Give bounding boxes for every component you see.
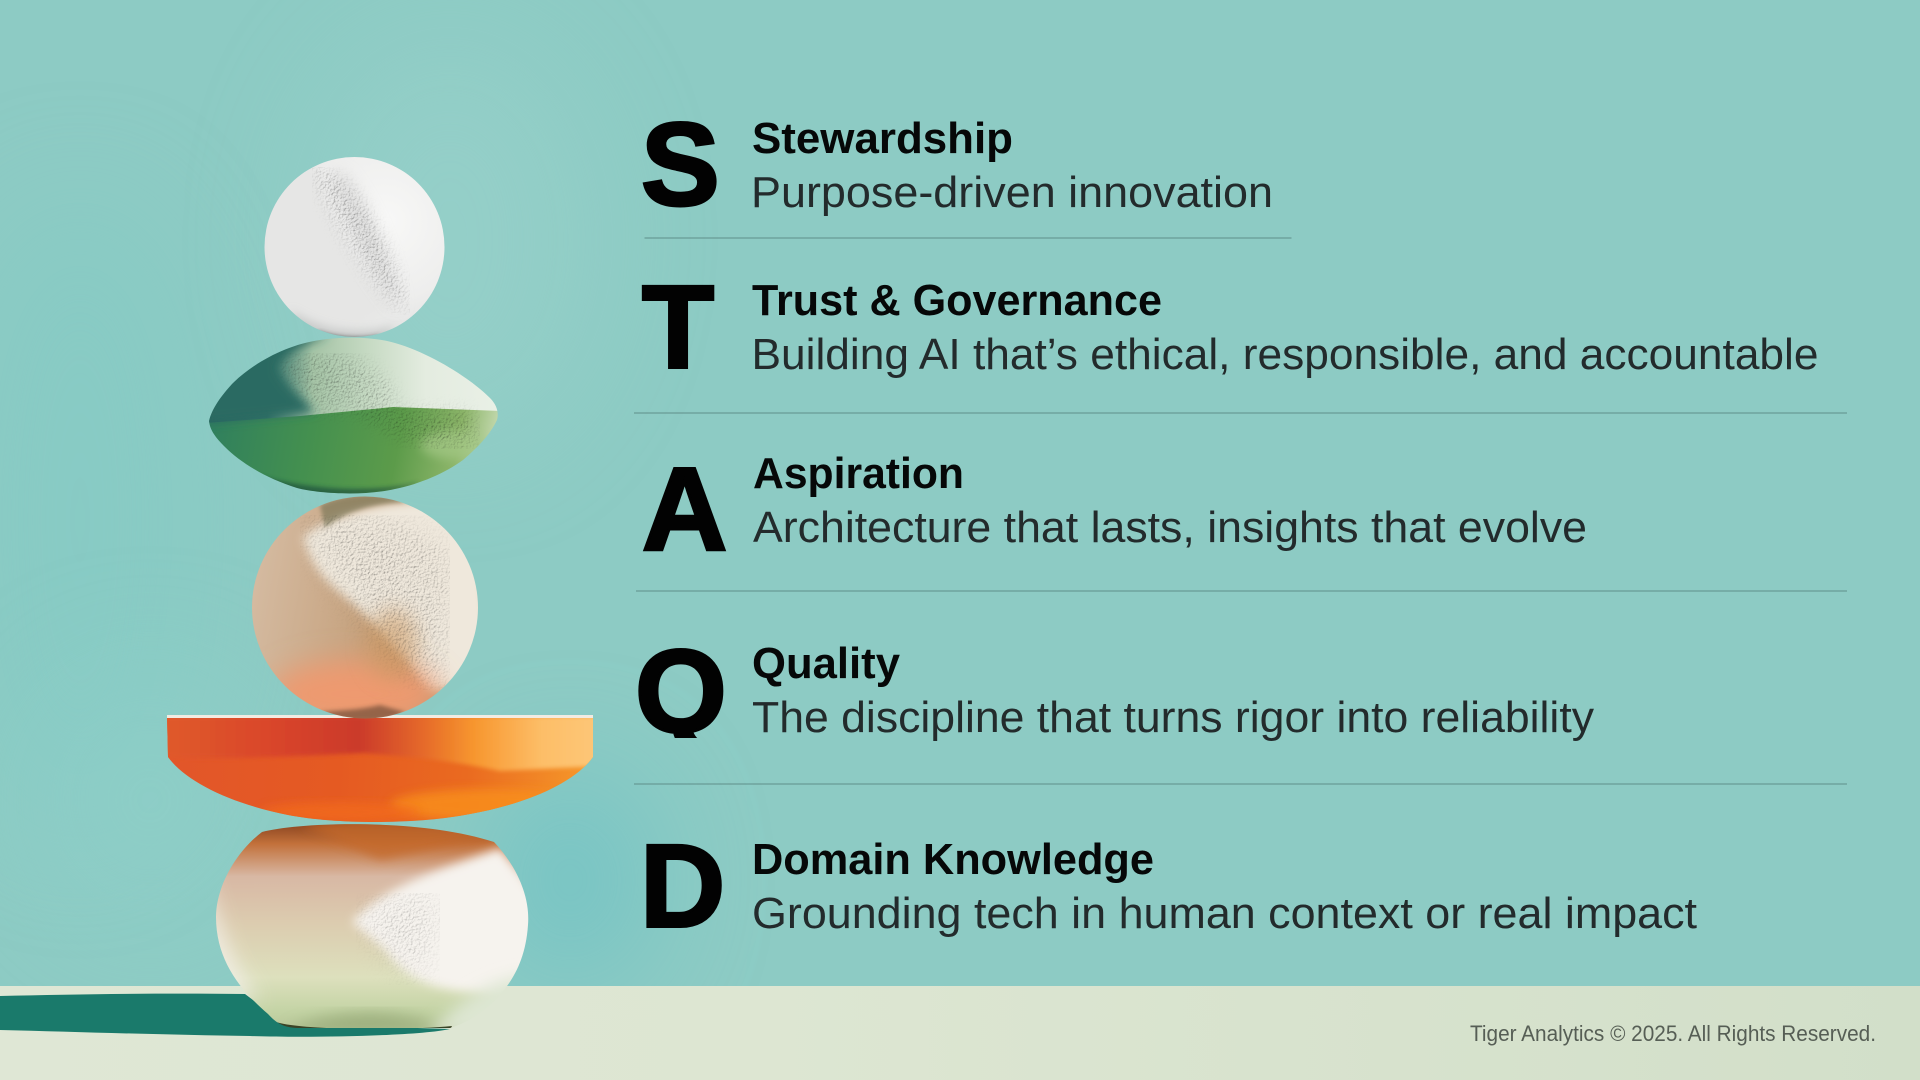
row Q: letter Q: Q [635,626,727,758]
divider 3 [636,590,1847,592]
row A: Aspiration [642,444,1587,576]
footer copyright: Tiger Analytics © 2025. All Rights Reserved. [1470,1021,1876,1046]
row A: Aspiration: A [642,444,727,576]
Quality text [752,639,1594,742]
row D: Domain Knowledge: Domain Knowledge [752,835,1154,884]
acronym list [634,99,1847,952]
stone: bottom white sphere [216,824,528,1028]
stone: green lens [205,335,505,500]
row T: Trust & Governance [642,262,1818,394]
row D: Domain Knowledge [640,820,1697,952]
row A: Aspiration: Architecture that lasts, insights that evolve [753,503,1587,552]
bowl white lip [167,715,593,718]
row T: Trust & Governance: Building AI that’s ethical, responsible, and accountable [752,330,1818,379]
divider 1 [644,238,1292,239]
divider 4 [634,784,1847,785]
row T: Trust & Governance: Trust & Governance [752,276,1162,325]
divider 2 [634,412,1847,414]
row D: Domain Knowledge: Grounding tech in human context or real impact [752,889,1697,938]
row S: Stewardship [641,99,1273,231]
row D: Domain Knowledge: D [640,820,725,952]
illustration: balancing stones [160,155,600,1035]
Quality text: Quality [752,639,901,688]
row S: Stewardship: S [641,99,720,231]
stone: orange bowl [160,715,600,828]
row T: Trust & Governance: T [642,262,714,394]
row S: Stewardship: Purpose-driven innovation [751,168,1273,217]
row A: Aspiration: Aspiration [753,449,964,498]
row S: Stewardship: Stewardship [752,114,1013,163]
Quality text: The discipline that turns rigor into reliability [752,693,1594,742]
stone: peach sphere [252,496,478,718]
floor [0,986,1920,1080]
cast shadow on floor [0,994,450,1037]
stone: white top sphere [262,155,448,345]
